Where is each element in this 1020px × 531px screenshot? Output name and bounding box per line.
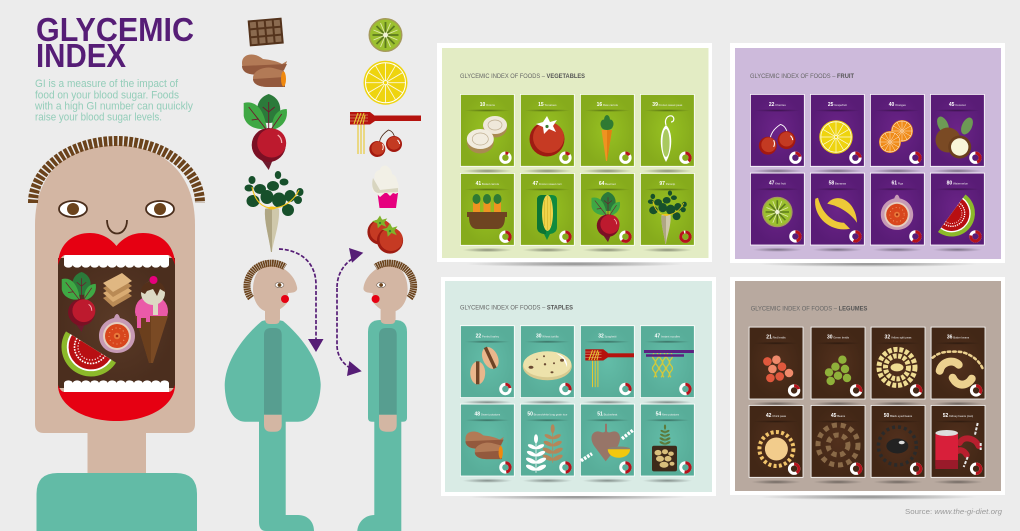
card: beetroot xyxy=(580,173,635,252)
hair xyxy=(33,141,200,203)
body xyxy=(225,320,321,422)
card: bananas xyxy=(810,173,865,252)
icon: beetroot xyxy=(62,272,96,332)
card: watermelon: 80 Watermelon xyxy=(947,181,968,187)
icon: kiwi xyxy=(368,18,402,52)
heading: GLYCEMIC INDEX OF FOODS – LEGUMES xyxy=(751,306,867,313)
title xyxy=(36,11,194,74)
large face figure xyxy=(33,141,200,531)
card: spaghetti: 32 Spaghetti xyxy=(598,333,617,339)
intro text xyxy=(34,78,193,124)
card: kidney beans xyxy=(931,405,985,484)
icon: chocolate xyxy=(248,18,284,46)
card: tomatoes: 15 Tomatoes xyxy=(538,102,557,108)
card: parsnip: 97 Parsnip xyxy=(659,181,676,187)
arm xyxy=(264,328,282,415)
card: boiled carrots xyxy=(460,173,515,252)
body xyxy=(36,473,197,531)
card: peeled barley xyxy=(460,325,515,404)
card: red lentils xyxy=(749,327,803,406)
figure: slim person xyxy=(357,263,414,531)
icon: fig xyxy=(99,314,135,353)
card: raw carrots: 16 Raw carrots xyxy=(597,102,619,108)
hand xyxy=(264,415,282,432)
card: coconut xyxy=(930,94,985,173)
card: buckwheat xyxy=(580,404,635,483)
icon: cupcake xyxy=(372,166,399,208)
panel: vegetables xyxy=(437,43,712,267)
icon: watermelon xyxy=(50,331,116,388)
card: oranges: 40 Oranges xyxy=(889,102,906,108)
card: red lentils: 21 Red lentils xyxy=(766,335,786,341)
title: INDEX xyxy=(36,37,126,74)
card: raw carrots xyxy=(580,94,635,173)
figure: heavy person xyxy=(225,263,321,531)
card: bananas: 58 Bananas xyxy=(829,181,847,187)
upper teeth xyxy=(64,255,169,268)
card: wheat tortilla: 30 Wheat tortilla xyxy=(536,333,559,339)
card: kidney beans: 52 Kidney beans (can) xyxy=(943,413,973,419)
card: kiwi fruit: 47 Kiwi fruit xyxy=(769,181,786,187)
card: chick peas xyxy=(749,405,803,484)
heading: GLYCEMIC INDEX OF FOODS – FRUIT xyxy=(750,73,854,80)
card: chick peas: 42 Chick peas xyxy=(766,413,787,419)
arm xyxy=(379,328,397,415)
icon: beetroot top xyxy=(244,94,287,170)
title: GLYCEMIC xyxy=(36,11,194,48)
hand xyxy=(379,415,397,432)
card: grapefruit xyxy=(810,94,865,173)
eyes xyxy=(59,201,174,217)
card: butter beans: 36 Butter beans xyxy=(947,335,970,341)
head xyxy=(363,263,414,324)
head xyxy=(247,263,297,324)
card: frozen sweet corn: 47 Frozen sweet corn xyxy=(533,181,562,187)
arrow: up xyxy=(337,248,363,288)
card: long grain rice: 50 Brown/white long grain rice xyxy=(527,412,568,418)
intro text: food on your blood sugar. Foods xyxy=(35,90,179,102)
body xyxy=(368,320,407,422)
card: yellow split peas: 32 Yellow split peas xyxy=(885,335,912,341)
card: beetroot: 64 Beetroot xyxy=(599,181,616,187)
icon: crackers xyxy=(103,273,132,307)
arrow: down xyxy=(279,249,324,352)
card: onions: 10 Onions xyxy=(480,102,496,108)
card: new potatoes: 54 New potatoes xyxy=(656,412,680,418)
icon: tomatoes xyxy=(367,215,403,254)
source: Source: www.the-gi-diet.org xyxy=(905,507,1003,516)
intro text: with a high GI number can quuickly xyxy=(34,100,193,112)
card: grapefruit: 25 Grapefruit xyxy=(828,102,847,108)
heading: GLYCEMIC INDEX OF FOODS – STAPLES xyxy=(460,304,573,312)
card: long grain rice xyxy=(520,404,575,483)
icon: cherries xyxy=(369,130,402,157)
card: coconut: 45 Coconut xyxy=(949,102,966,108)
card: instant noodles xyxy=(640,325,695,404)
head xyxy=(35,145,195,433)
card: yellow split peas xyxy=(871,327,925,406)
card: black eyed beans: 50 Black eyed beans xyxy=(884,413,913,419)
lower teeth xyxy=(64,380,169,392)
card: sweet potatoes: 48 Sweet potatoes xyxy=(474,412,501,418)
nose xyxy=(107,220,127,234)
card: black eyed beans xyxy=(871,405,925,484)
leg and foot xyxy=(259,421,314,531)
card: watermelon xyxy=(930,173,985,252)
card: buckwheat: 51 Buckwheat xyxy=(597,412,618,418)
heading: GLYCEMIC INDEX OF FOODS – VEGETABLES xyxy=(460,73,585,80)
icon: sweet potatoes xyxy=(242,54,287,87)
panel: legumes xyxy=(730,277,1005,500)
icon: spaghetti fork xyxy=(350,112,421,154)
arrow: lower xyxy=(337,288,362,376)
card: peeled barley: 22 Peeled barley xyxy=(476,333,500,339)
card: cherries xyxy=(750,94,805,173)
upper lip xyxy=(58,233,175,265)
leg and foot xyxy=(357,421,401,531)
card: cherries: 22 Cherries xyxy=(769,102,786,108)
icon: parsnip xyxy=(244,171,304,252)
card: parsnip xyxy=(640,173,695,252)
card: frozen sweet peas: 39 Frozen sweet peas xyxy=(652,102,683,108)
card: sweet potatoes xyxy=(460,404,515,483)
card: wheat tortilla xyxy=(520,325,575,404)
card: new potatoes xyxy=(640,404,695,483)
panel: fruit xyxy=(730,43,1005,267)
card: figs: 61 Figs xyxy=(891,181,904,187)
card: tomatoes xyxy=(520,94,575,173)
lower lip xyxy=(58,385,175,421)
mouth xyxy=(50,233,175,421)
card: butter beans xyxy=(931,327,985,406)
card: instant noodles: 47 Instant noodles xyxy=(655,333,681,339)
intro text: raise your blood sugar levels. xyxy=(35,112,162,124)
card: boiled carrots: 41 Boiled carrots xyxy=(476,181,500,187)
card: frozen sweet peas xyxy=(640,94,695,173)
card: kiwi fruit xyxy=(750,173,805,252)
card: frozen sweet corn xyxy=(520,173,575,252)
card: figs xyxy=(870,173,925,252)
intro text: GI is a measure of the impact of xyxy=(35,78,179,90)
card: green lentils xyxy=(811,327,865,406)
icon: lemon xyxy=(364,61,408,105)
card: spaghetti xyxy=(580,325,635,404)
icon: ice cream xyxy=(135,276,168,363)
card: green lentils: 30 Green lentils xyxy=(827,335,850,341)
card: beans xyxy=(811,405,865,484)
neck xyxy=(88,425,146,473)
card: beans: 45 Beans xyxy=(831,413,846,419)
panel: staples xyxy=(441,277,716,500)
card: oranges xyxy=(870,94,925,173)
card: onions xyxy=(460,94,515,173)
